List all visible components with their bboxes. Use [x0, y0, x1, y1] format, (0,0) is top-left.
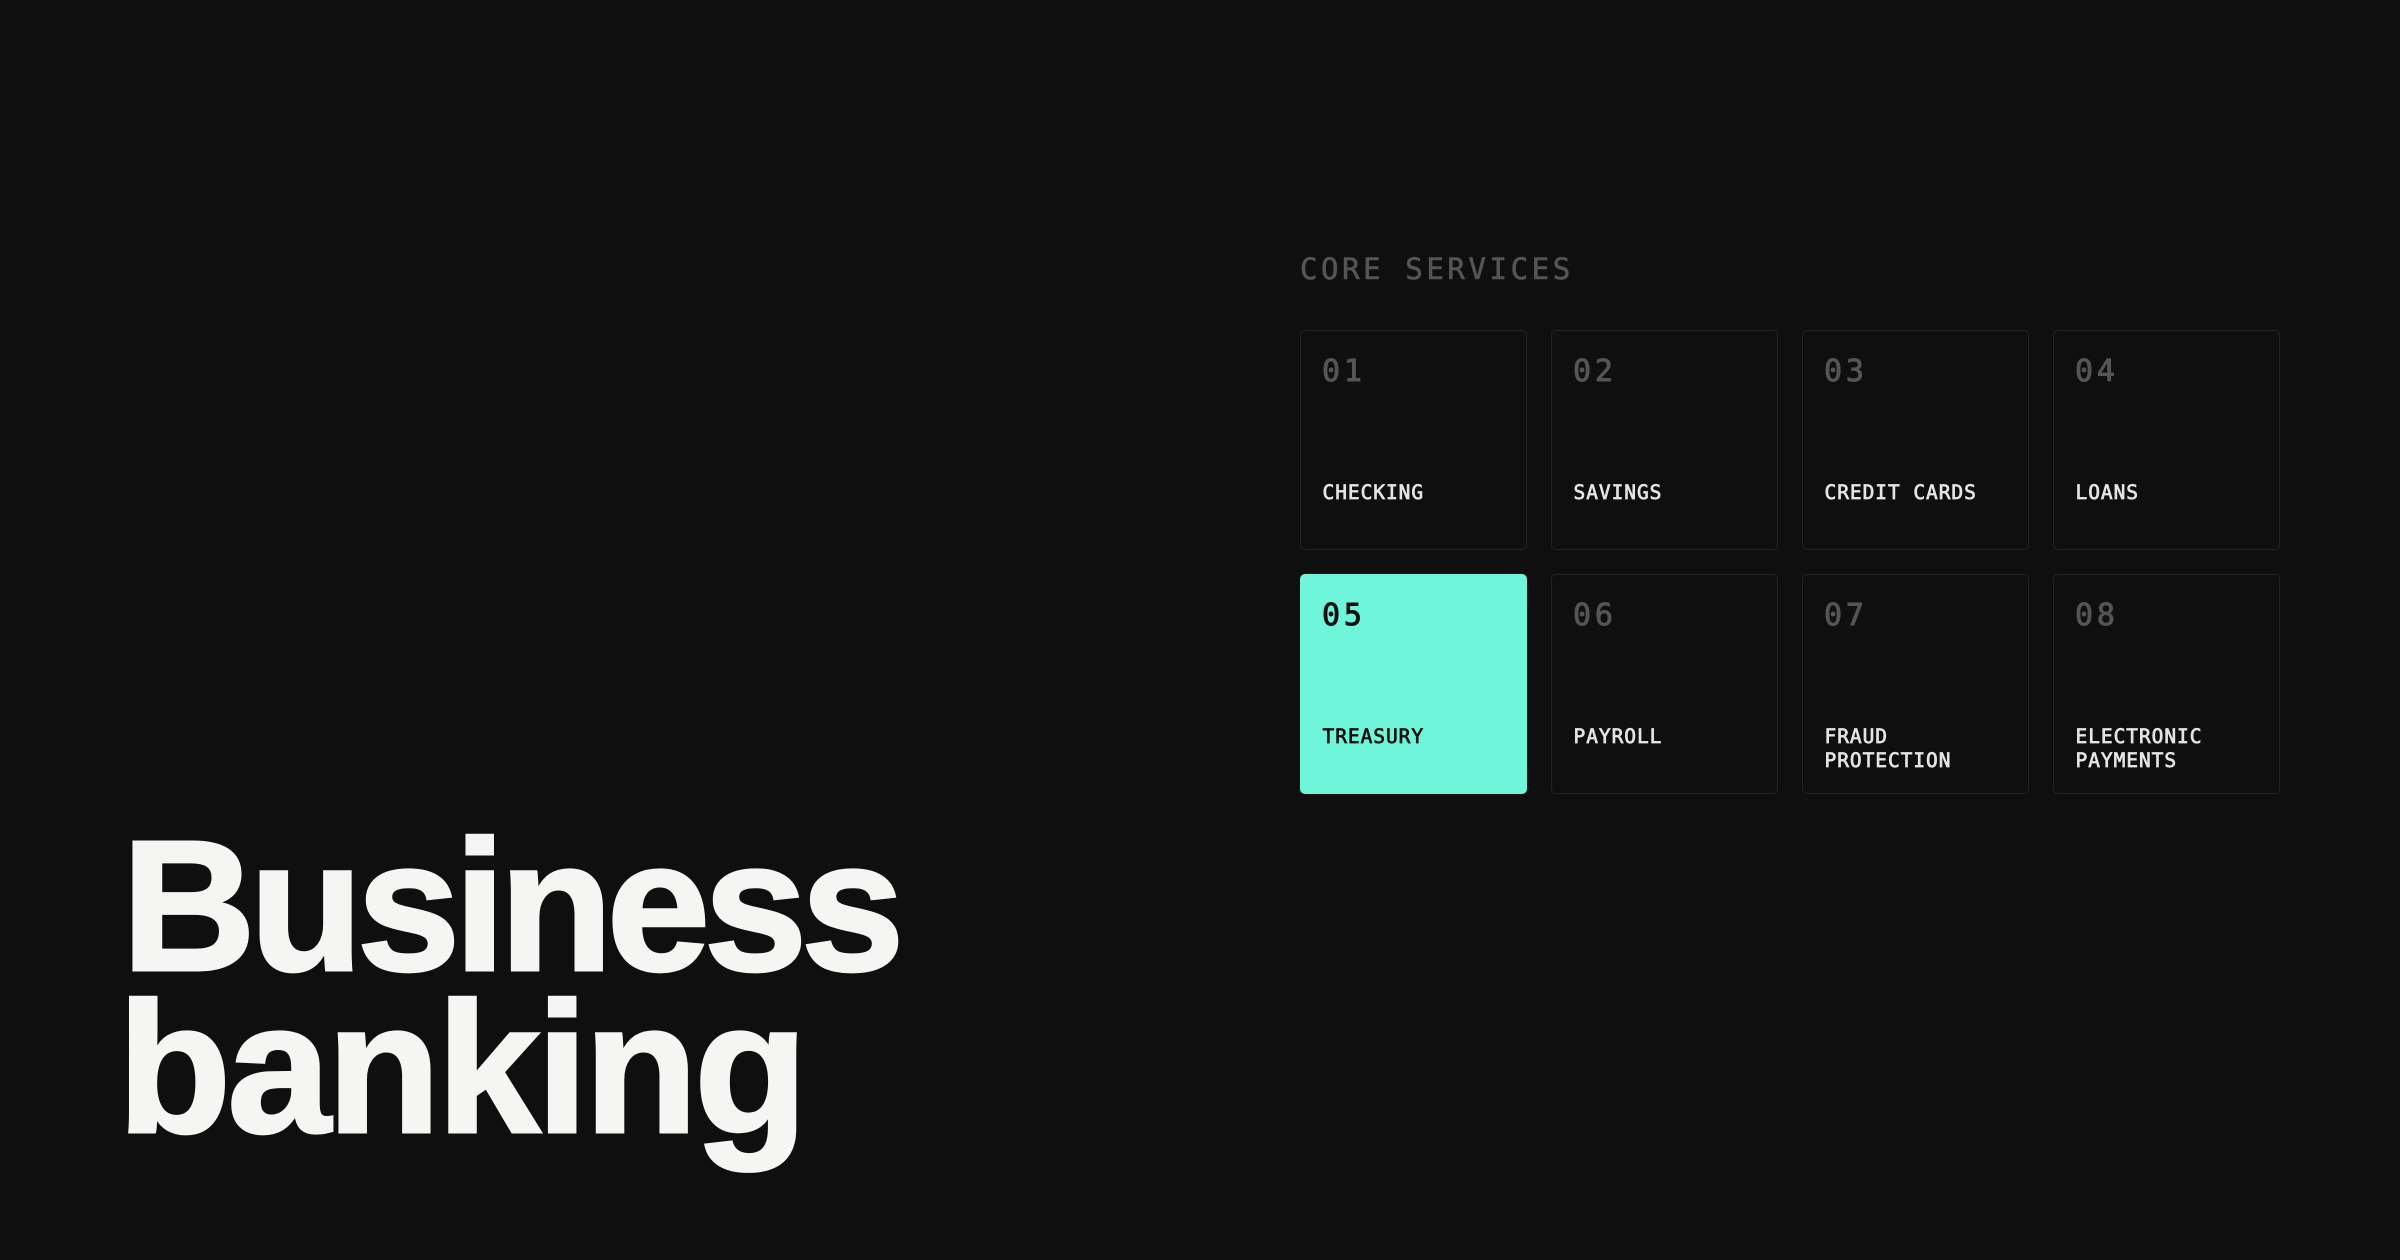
card 06: payroll: 06: [1573, 598, 1617, 632]
title: [118, 803, 898, 1173]
card 08: electronic payments: 08: [2075, 598, 2119, 632]
card 04: loans: 04: [2075, 354, 2119, 388]
section heading: core services: CORE SERVICES: [1300, 252, 1574, 286]
card 03: credit cards: CREDIT CARDS: [1824, 480, 1977, 504]
card 05: treasury (highlighted): [1300, 574, 1527, 794]
card 08: electronic payments: ELECTRONIC: [2076, 724, 2202, 748]
card 04: loans: [2053, 330, 2280, 550]
card 06: payroll: PAYROLL: [1574, 724, 1662, 748]
card 01: checking: CHECKING: [1322, 480, 1424, 504]
card 02: savings: SAVINGS: [1574, 480, 1662, 504]
card 07: fraud protection: FRAUD: [1824, 724, 1888, 748]
card 06: payroll: [1551, 574, 1778, 794]
card 02: savings: [1551, 330, 1778, 550]
card 07: fraud protection: 07: [1824, 598, 1868, 632]
card 02: savings: 02: [1573, 354, 1617, 388]
card 05: treasury (highlighted): 05: [1322, 598, 1366, 632]
card 01: checking: 01: [1322, 354, 1366, 388]
card 07: fraud protection: PROTECTION: [1824, 749, 1951, 772]
card 03: credit cards: [1802, 330, 2029, 550]
card 05: treasury (highlighted): TREASURY: [1322, 724, 1424, 748]
card 03: credit cards: 03: [1824, 354, 1868, 388]
title: banking: [118, 965, 804, 1172]
card 07: fraud protection: [1802, 574, 2029, 794]
title: Business: [122, 803, 898, 1010]
card 01: checking: [1300, 330, 1527, 550]
card 08: electronic payments: [2053, 574, 2280, 794]
card 08: electronic payments: PAYMENTS: [2076, 749, 2177, 772]
card 04: loans: LOANS: [2076, 480, 2139, 504]
